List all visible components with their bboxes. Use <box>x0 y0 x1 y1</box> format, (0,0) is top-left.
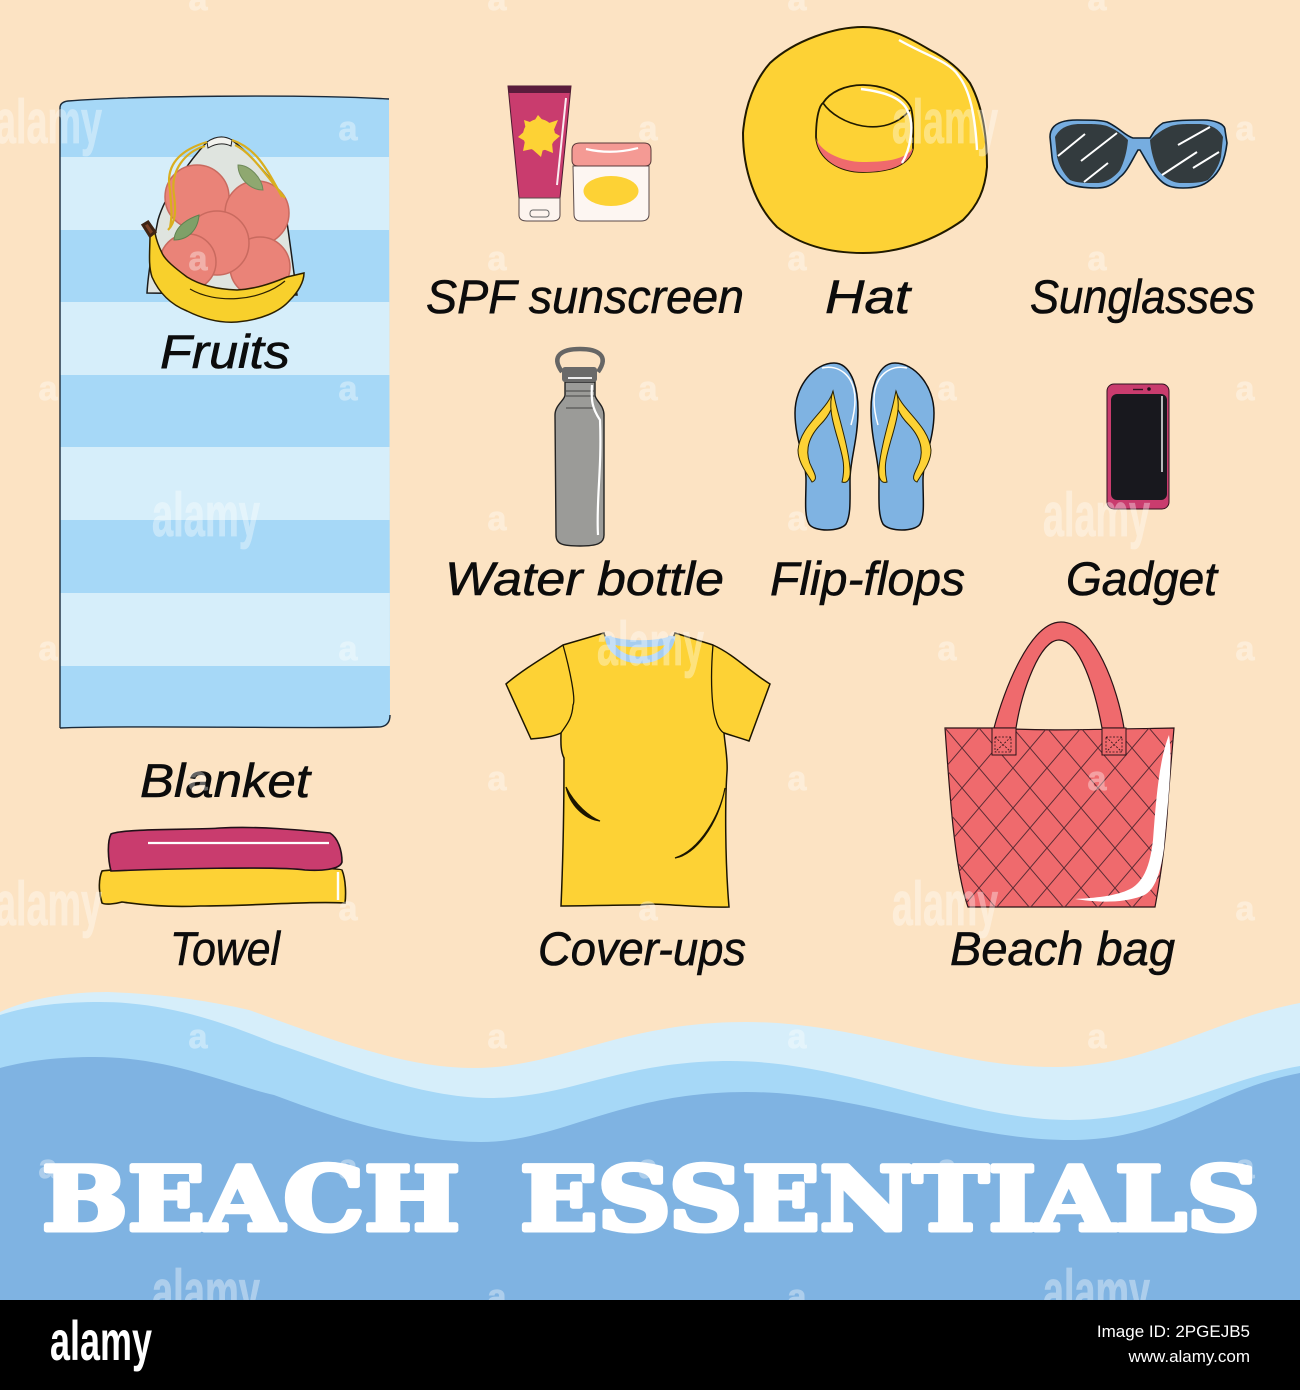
label: Flip-flops: Flip-flops <box>770 552 965 605</box>
jar <box>573 166 649 221</box>
bag body <box>945 728 1174 907</box>
watermark overlay: a <box>938 370 958 408</box>
watermark overlay: alamy <box>597 610 704 679</box>
label: SPF sunscreen: SPF sunscreen <box>426 270 744 323</box>
label: Blanket: Blanket <box>140 754 312 807</box>
label: Towel: Towel <box>170 922 281 975</box>
watermark overlay: a <box>1236 370 1256 408</box>
watermark overlay: a <box>938 1148 958 1186</box>
pink towel <box>108 827 342 871</box>
icon: water bottle <box>555 349 604 546</box>
watermark overlay: a <box>488 500 508 538</box>
label: Hat: Hat <box>825 270 912 323</box>
tabs <box>992 728 1016 755</box>
watermark overlay: a <box>1088 760 1108 798</box>
watermark overlay: a <box>788 760 808 798</box>
watermark overlay: a <box>39 1148 59 1186</box>
left flip-flop <box>795 363 858 530</box>
title: ESSENTIALS <box>520 1147 1260 1251</box>
label: Gadget: Gadget <box>1066 552 1219 605</box>
watermark overlay: a <box>788 500 808 538</box>
watermark overlay: a <box>339 630 359 668</box>
icon: sunglasses <box>1050 120 1227 188</box>
handle <box>994 622 1124 728</box>
watermark overlay: a <box>1236 630 1256 668</box>
watermark overlay: alamy <box>1043 1258 1150 1327</box>
watermark overlay: a <box>488 1278 508 1316</box>
watermark overlay: a <box>639 890 659 928</box>
watermark overlay: a <box>189 240 209 278</box>
yellow towel <box>99 868 346 906</box>
watermark overlay: a <box>189 760 209 798</box>
hat crown <box>816 85 913 172</box>
watermark overlay: a <box>488 240 508 278</box>
title <box>42 1147 1260 1251</box>
watermark overlay: alamy <box>1043 481 1150 550</box>
watermark overlay: a <box>488 1018 508 1056</box>
watermark overlay: a <box>488 760 508 798</box>
collar <box>601 633 678 668</box>
watermark overlay: a <box>189 1018 209 1056</box>
label: Water bottle: Water bottle <box>445 552 724 605</box>
icon: flip-flops <box>795 363 934 530</box>
watermark overlay: alamy <box>0 88 102 157</box>
watermark overlay: alamy <box>152 1258 260 1327</box>
watermark overlay: alamy <box>0 870 102 939</box>
watermark overlay: a <box>639 110 659 148</box>
footer logo: alamy <box>50 1309 152 1372</box>
footer bar <box>0 1300 1300 1390</box>
watermark overlay: a <box>39 630 59 668</box>
leaves <box>238 165 263 190</box>
watermark overlay: alamy <box>152 481 260 550</box>
watermark overlay: a <box>938 630 958 668</box>
icon: fruit mesh bag with banana <box>143 137 304 322</box>
watermark overlay: a <box>339 110 359 148</box>
watermark overlay: a <box>339 370 359 408</box>
panel: sea waves <box>0 992 1300 1300</box>
panel: blanket <box>50 96 400 728</box>
watermark overlay: a <box>788 1018 808 1056</box>
label: Cover-ups: Cover-ups <box>538 922 746 975</box>
icon: sunscreen tube and jar <box>508 86 651 221</box>
label: Fruits: Fruits <box>160 325 290 378</box>
watermark overlay: alamy <box>892 88 998 157</box>
watermark overlay: a <box>1236 890 1256 928</box>
banana <box>150 233 304 322</box>
icon: t-shirt <box>506 633 770 907</box>
watermark overlay: a <box>639 1148 659 1186</box>
right flip-flop <box>871 363 934 530</box>
footer image id: Image ID: 2PGEJB5 <box>1097 1322 1250 1341</box>
watermark overlay: a <box>1236 1148 1256 1186</box>
watermark overlay: a <box>788 1278 808 1316</box>
watermark overlay: a <box>339 890 359 928</box>
drawstrings <box>168 140 285 230</box>
mesh bag <box>147 140 297 295</box>
watermark overlay: a <box>639 370 659 408</box>
watermark overlay: a <box>788 240 808 278</box>
icon: sun hat <box>743 27 987 253</box>
label: Sunglasses: Sunglasses <box>1030 270 1255 323</box>
sun <box>518 115 560 157</box>
watermark overlay: a <box>1088 240 1108 278</box>
watermark overlay: alamy <box>892 870 998 939</box>
icon: folded towels <box>99 827 346 906</box>
label: Beach bag: Beach bag <box>950 922 1175 975</box>
watermark overlay: a <box>1088 1018 1108 1056</box>
tube <box>508 86 571 198</box>
footer url: www.alamy.com <box>1127 1347 1250 1366</box>
watermark overlay: a <box>39 370 59 408</box>
icon: smartphone <box>1107 384 1169 509</box>
watermark overlay: a <box>339 1148 359 1186</box>
watermark overlay: a <box>1236 110 1256 148</box>
title: BEACH <box>42 1147 460 1251</box>
apples <box>160 165 290 297</box>
highlight <box>1075 735 1170 902</box>
icon: beach bag <box>945 622 1174 907</box>
